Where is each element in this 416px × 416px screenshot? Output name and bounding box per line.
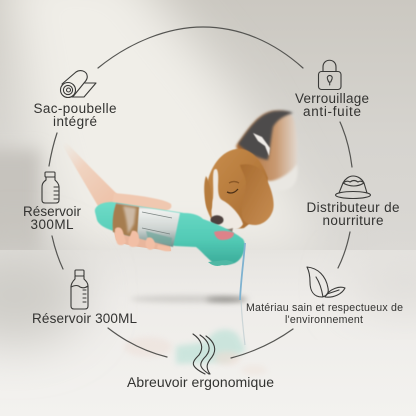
label: Distributeur de: [306, 200, 400, 215]
pale chest: [266, 164, 298, 191]
right ear: [240, 164, 274, 225]
feature: Réservoir left: [23, 172, 82, 232]
closed eye: [227, 189, 238, 193]
label: Réservoir 300ML: [32, 311, 137, 326]
feature: Abreuvoir: [127, 334, 274, 390]
feature: Verrouillage: anti-fuite: [303, 104, 361, 119]
icon: padlock: [318, 60, 341, 90]
bottle feet: [208, 260, 234, 266]
left ear: [204, 176, 212, 211]
dog head: [205, 149, 268, 229]
feature: Sac-poubelle: [34, 71, 116, 129]
fingers: [115, 227, 171, 251]
dog: [204, 111, 298, 233]
dog body tan: [236, 111, 297, 182]
dark saddle: [238, 111, 293, 160]
label: Sac-poubelle: [34, 101, 116, 116]
icon: rolled bag: [60, 71, 96, 98]
label: Verrouillage: [295, 91, 369, 106]
tongue: [214, 231, 234, 240]
thumb: [112, 193, 171, 211]
kibble: [113, 204, 139, 238]
icon: leaves: [307, 267, 345, 297]
feature: Verrouillage: [295, 60, 369, 119]
label: Matériau sain et respectueux de: [246, 302, 403, 314]
feature: Distributeur: nourriture: [322, 213, 384, 228]
feature: Distributeur: [306, 176, 400, 228]
feature: Matériau: l'environnement: [285, 314, 363, 326]
blaze and muzzle: [211, 169, 243, 229]
bottle: [95, 202, 245, 266]
clear compartment: [113, 203, 180, 247]
mouth shade: [212, 224, 233, 233]
icon: food bowl: [336, 176, 370, 198]
feature: Réservoir 300ML: [32, 270, 137, 326]
icon: water waves: [193, 334, 215, 374]
palm: [113, 228, 171, 251]
feature: Réservoir left: 300ML: [30, 217, 74, 232]
arc connectors: [49, 27, 352, 358]
label: Abreuvoir ergonomique: [127, 374, 274, 390]
arm: [60, 141, 126, 206]
icon: small bottle: [42, 172, 59, 203]
teal body: [95, 202, 245, 265]
water stream: [240, 243, 245, 300]
label: Réservoir: [23, 204, 82, 219]
icon: large bottle: [71, 270, 88, 309]
feature: Matériau: [246, 267, 403, 326]
feature: Sac-poubelle: intégré: [53, 114, 97, 129]
floor shadow and reflection: [124, 296, 267, 375]
nose: [210, 215, 224, 225]
